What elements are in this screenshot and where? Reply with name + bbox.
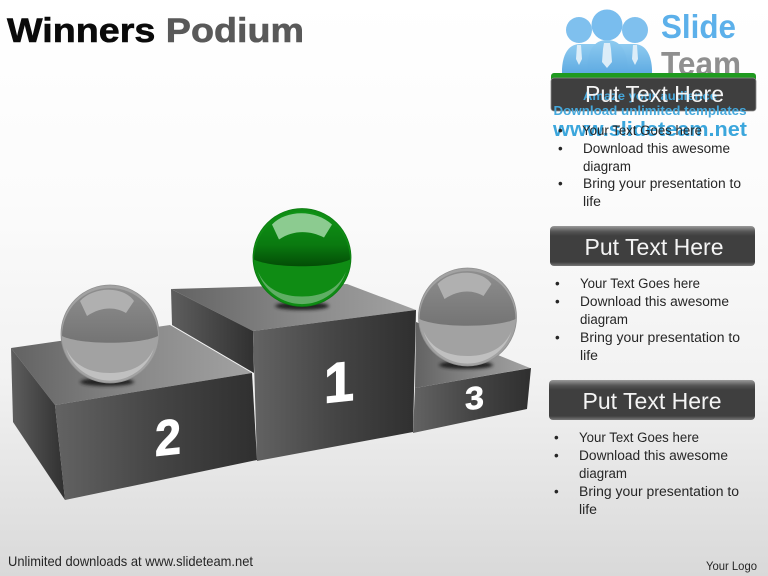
heading 2: Put Text Here bbox=[584, 234, 724, 260]
logo: SlideTeam bbox=[562, 8, 741, 82]
bullet list 3: Bring your presentation to bbox=[579, 484, 739, 499]
bullet list 1: life bbox=[583, 194, 601, 209]
bullet list 2: Your Text Goes here bbox=[580, 276, 700, 291]
panel: text block 1 bbox=[551, 73, 756, 209]
panel: text block 2 bbox=[550, 226, 755, 363]
ball: silver left bbox=[61, 285, 159, 383]
footer: logo placeholder: Your Logo bbox=[706, 559, 757, 573]
heading 3: Put Text Here bbox=[582, 388, 722, 414]
ball shadow: green bbox=[275, 302, 329, 310]
ball shadow: silver right bbox=[439, 361, 493, 369]
number 2: 2 bbox=[155, 408, 181, 467]
podium block 1 bbox=[171, 284, 416, 461]
number 3: 3 bbox=[465, 379, 484, 417]
panel: text block 3 bbox=[549, 380, 755, 517]
bullet list 1: • bbox=[558, 176, 563, 191]
bullet list 1: • bbox=[558, 123, 563, 138]
bullet list 3: • bbox=[554, 484, 559, 499]
bullet list 3: • bbox=[554, 430, 559, 445]
bullet list 1: Download this awesome bbox=[583, 141, 730, 156]
bullet list 2: • bbox=[555, 330, 560, 345]
ball: silver right bbox=[418, 268, 516, 366]
green grass strip bbox=[551, 73, 756, 85]
title: Winners Podium bbox=[7, 12, 304, 50]
icon: team of three people bbox=[562, 10, 652, 73]
footer: downloads note: Unlimited downloads at www.slideteam.net bbox=[8, 554, 253, 569]
podium block 2 bbox=[11, 325, 257, 500]
bullet list 3: diagram bbox=[579, 466, 627, 481]
bullet list 2: life bbox=[580, 348, 598, 363]
chart: winners podium bbox=[11, 208, 531, 500]
bullet list 1: • bbox=[558, 141, 563, 156]
bullet list 1: Your Text Goes here bbox=[582, 123, 702, 138]
bullet list 2: Download this awesome bbox=[580, 294, 729, 309]
watermark line 1: Amaze your audience bbox=[583, 89, 717, 103]
heading bar 2 bbox=[550, 226, 755, 266]
bullet list 3: life bbox=[579, 502, 597, 517]
bullet list 3: • bbox=[554, 448, 559, 463]
podium block 3 bbox=[413, 322, 531, 433]
bullet list 2: Bring your presentation to bbox=[580, 330, 740, 345]
bullet list 1 bbox=[558, 123, 741, 209]
watermark url: www.slideteam.net bbox=[552, 119, 747, 141]
bullet list 3: Your Text Goes here bbox=[579, 430, 699, 445]
bullet list 3: Download this awesome bbox=[579, 448, 728, 463]
logo word: Team: Team bbox=[661, 45, 741, 82]
logo word: Slide: Slide bbox=[661, 8, 736, 45]
bullet list 2 bbox=[555, 276, 740, 363]
watermark line 2: Download unlimited templates bbox=[554, 103, 746, 118]
heading 1: Put Text Here bbox=[585, 81, 724, 107]
bullet list 2: diagram bbox=[580, 312, 628, 327]
bullet list 1: Bring your presentation to bbox=[583, 176, 741, 191]
heading bar 1 bbox=[551, 78, 756, 111]
bullet list 3 bbox=[554, 430, 739, 517]
ball: green winner bbox=[253, 208, 351, 306]
bullet list 1: diagram bbox=[583, 159, 631, 174]
bullet list 2: • bbox=[555, 276, 560, 291]
heading bar 3 bbox=[549, 380, 755, 420]
ball shadow: silver left bbox=[80, 378, 134, 386]
bullet list 2: • bbox=[555, 294, 560, 309]
number 1: 1 bbox=[324, 349, 354, 415]
